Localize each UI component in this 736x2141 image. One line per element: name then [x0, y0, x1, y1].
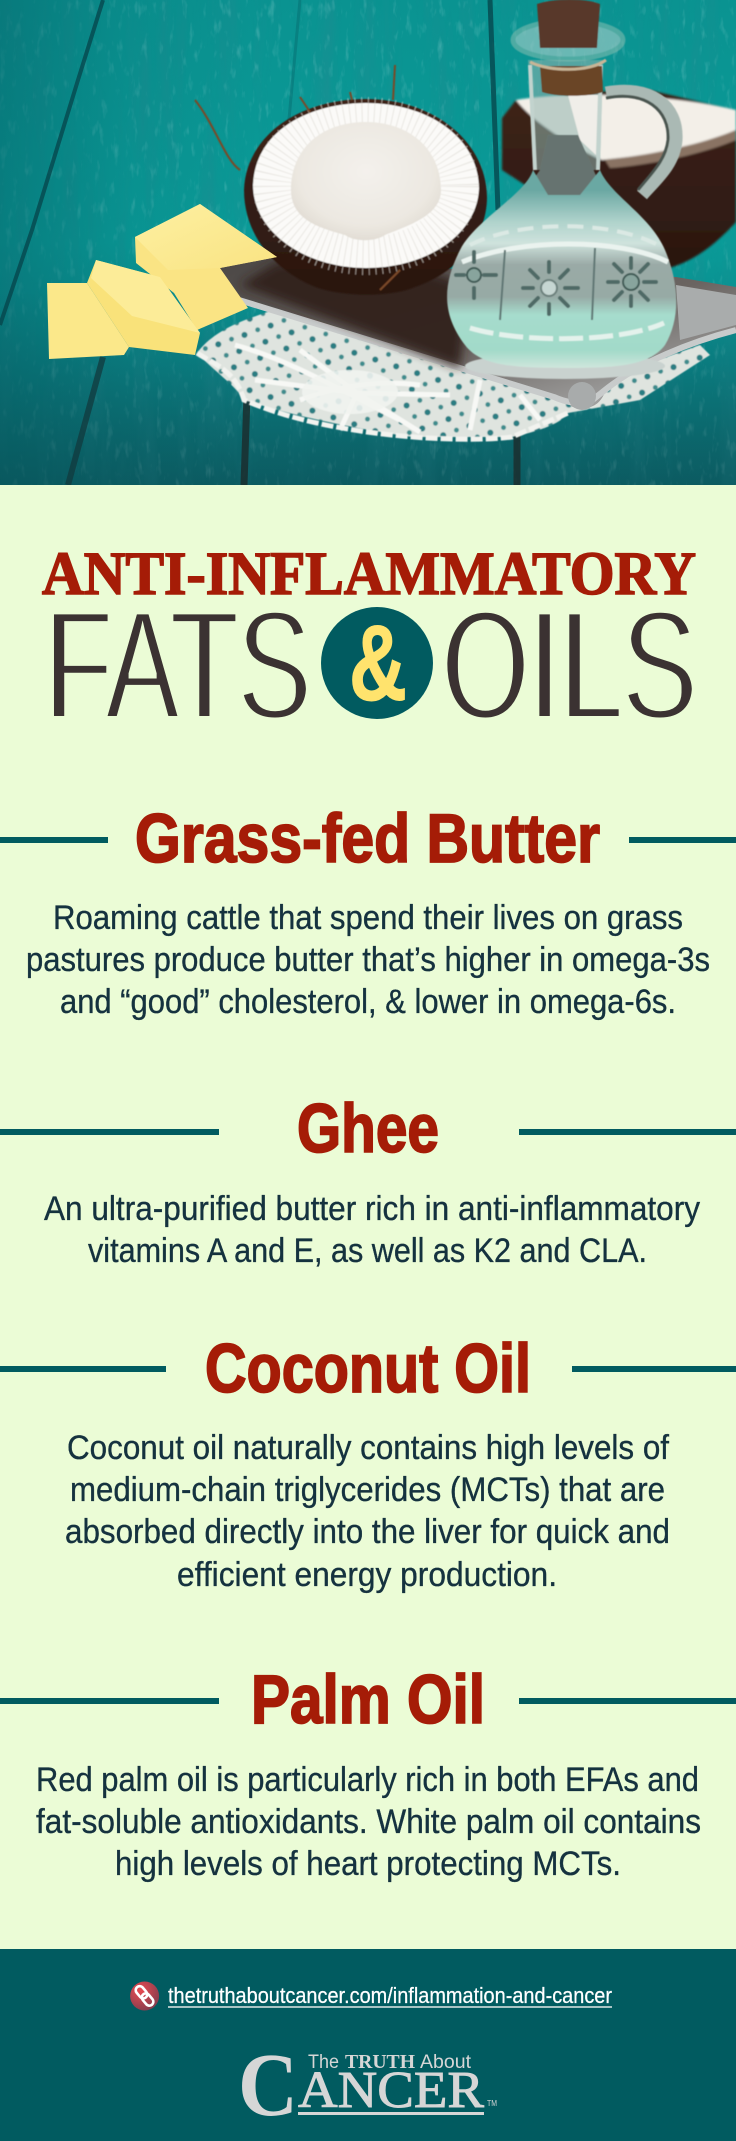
footer band: [0, 1949, 736, 2141]
divider lines: [0, 1129, 736, 1135]
butter pieces: [47, 204, 277, 359]
tray: [207, 257, 736, 410]
panel: grass-fed butter: [0, 800, 736, 1021]
ampersand badge: &: [349, 602, 407, 723]
bottle base: [465, 353, 665, 379]
logo: the truth about cancer: ANCER: [298, 2062, 484, 2119]
bottle body: [447, 170, 676, 368]
heading: palm oil: Palm Oil: [251, 1661, 485, 1738]
panel: coconut oil: [0, 1330, 736, 1594]
ampersand badge: [321, 602, 433, 723]
panel: ghee: [0, 1090, 736, 1270]
body text line 4: efficient energy production.: [177, 1556, 557, 1594]
panel: hero photo of butter, coconut and oil bottle: [0, 0, 736, 485]
icon: chain link: [130, 1982, 159, 2010]
title: Anti-Inflammatory Fats & Oils: [42, 541, 697, 752]
logo: the truth about cancer: TRUTH: [345, 2051, 415, 2073]
bottle rim: [513, 21, 623, 59]
logo: the truth about cancer: C: [238, 2036, 298, 2135]
body text line 3: absorbed directly into the liver for quick and: [65, 1513, 670, 1551]
body text line 2: vitamins A and E, as well as K2 and CLA.: [88, 1232, 647, 1270]
bottle sunburst patterns: [456, 252, 656, 314]
body text line 1: Coconut oil naturally contains high levels of: [67, 1429, 670, 1467]
bottle neck: [528, 60, 603, 170]
divider lines: [0, 837, 736, 843]
divider lines: [0, 1366, 736, 1372]
body text line 1: An ultra-purified butter rich in anti-inflammatory: [44, 1190, 700, 1228]
body text line 2: medium-chain triglycerides (MCTs) that are: [70, 1471, 665, 1509]
glass oil bottle with cork: [447, 0, 676, 379]
lace doily: [197, 300, 710, 439]
logo: the truth about cancer: About: [420, 2052, 472, 2073]
logo: the truth about cancer: The: [308, 2052, 339, 2073]
cork bottom: [540, 66, 603, 96]
title line: anti-inflammatory: ANTI-INFLAMMATORY: [42, 541, 696, 608]
body text line 3: and “good” cholesterol, & lower in omega-6s.: [60, 983, 676, 1021]
body text line 3: high levels of heart protecting MCTs.: [115, 1845, 621, 1883]
title word: fats: FATS: [45, 578, 311, 752]
front coconut half: [195, 65, 487, 295]
body text line 1: Roaming cattle that spend their lives on grass: [53, 899, 683, 937]
divider lines: [0, 1698, 736, 1704]
heading: grass-fed butter: Grass-fed Butter: [135, 800, 600, 877]
cork top: [537, 0, 600, 48]
heading: coconut oil: Coconut Oil: [205, 1330, 531, 1407]
heading: ghee: Ghee: [297, 1090, 439, 1167]
logo: the truth about cancer: TM: [487, 2099, 497, 2108]
body text line 2: fat-soluble antioxidants. White palm oil contains: [36, 1803, 701, 1841]
panel: palm oil: [0, 1661, 736, 1883]
back coconut half: [502, 88, 736, 270]
source url: thetruthaboutcancer.com/inflammation-and-cancer: [168, 1983, 612, 2008]
tray knob: [568, 382, 596, 410]
logo: the truth about cancer: [238, 2036, 497, 2135]
bottle handle: [606, 91, 676, 195]
wood plank background: [0, 0, 736, 485]
